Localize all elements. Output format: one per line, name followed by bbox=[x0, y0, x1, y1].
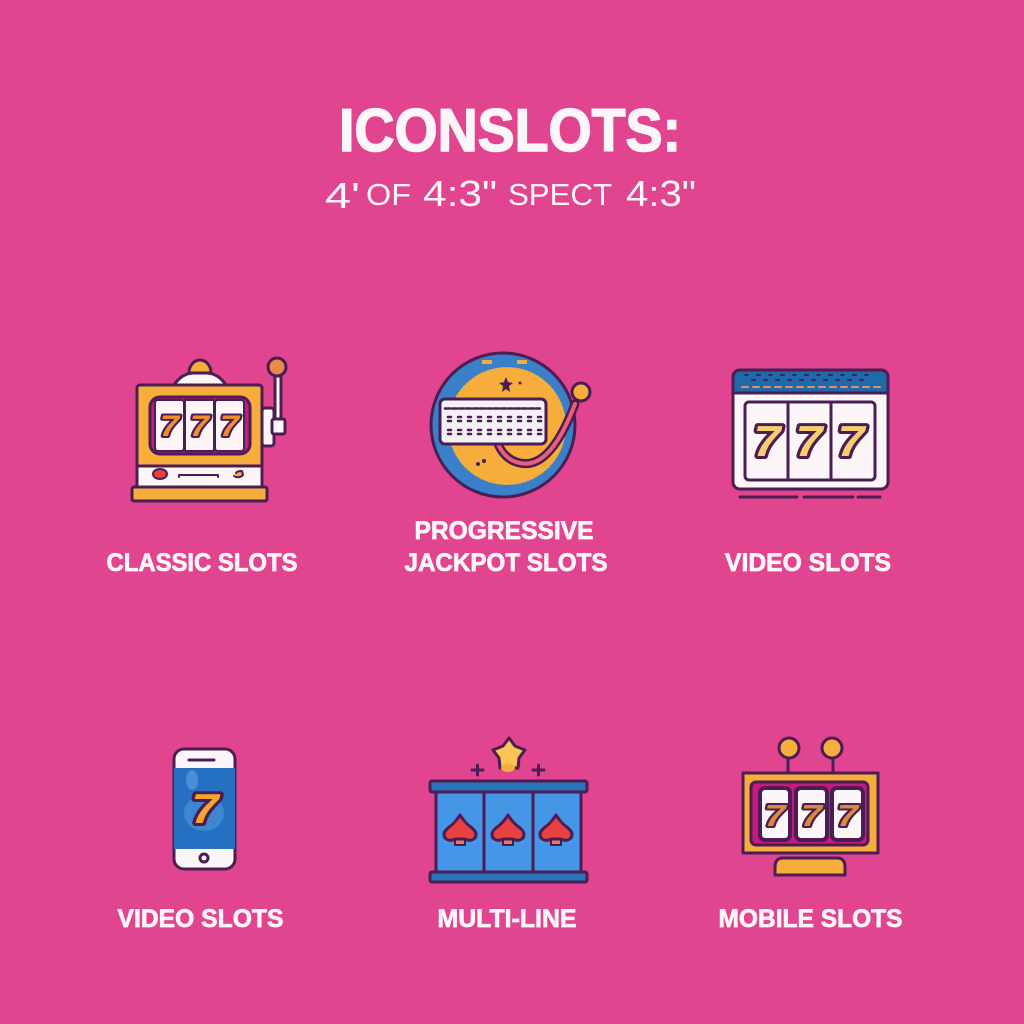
icon: smartphone: 7 bbox=[192, 785, 220, 832]
title: ICONSLOTS: bbox=[339, 97, 681, 164]
icon: classic slot machine bbox=[132, 358, 286, 501]
subtitle: 4' bbox=[325, 175, 360, 216]
label: classic slots: CLASSIC SLOTS bbox=[106, 549, 298, 577]
icon: progressive jackpot bbox=[431, 353, 590, 497]
label: progressive jackpot slots bbox=[404, 517, 608, 577]
subtitle: SPECT bbox=[508, 177, 612, 212]
subtitle bbox=[325, 173, 696, 216]
icon: classic slot machine: 7 bbox=[190, 410, 210, 443]
icon: video slots window: 7 bbox=[754, 417, 783, 466]
icon: classic slot machine: 7 bbox=[160, 410, 180, 443]
icon: multi-line slot bbox=[430, 738, 587, 882]
icon: smartphone bbox=[174, 749, 235, 869]
icon: mobile slot machine: 7 bbox=[801, 798, 824, 833]
label: multi-line: MULTI-LINE bbox=[438, 905, 576, 933]
label: mobile slots: MOBILE SLOTS bbox=[718, 905, 902, 933]
icon: classic slot machine: 7 bbox=[220, 410, 240, 443]
icon: mobile slot machine: 7 bbox=[837, 798, 860, 833]
icon: video slots window: 7 bbox=[838, 417, 867, 466]
icon: video slots window: 7 bbox=[796, 417, 825, 466]
icon: video slots window bbox=[733, 370, 888, 497]
icon: mobile slot machine: 7 bbox=[764, 798, 788, 833]
icon: mobile slot machine bbox=[743, 738, 878, 875]
subtitle: 4:3" bbox=[626, 173, 696, 214]
label: progressive jackpot slots: PROGRESSIVE bbox=[414, 517, 594, 545]
label: video slots: VIDEO SLOTS bbox=[725, 549, 891, 577]
subtitle: 4:3" bbox=[423, 173, 497, 214]
label: progressive jackpot slots: JACKPOT SLOTS bbox=[404, 549, 608, 577]
subtitle: OF bbox=[366, 177, 411, 212]
label: video slots mobile: VIDEO SLOTS bbox=[118, 905, 284, 933]
